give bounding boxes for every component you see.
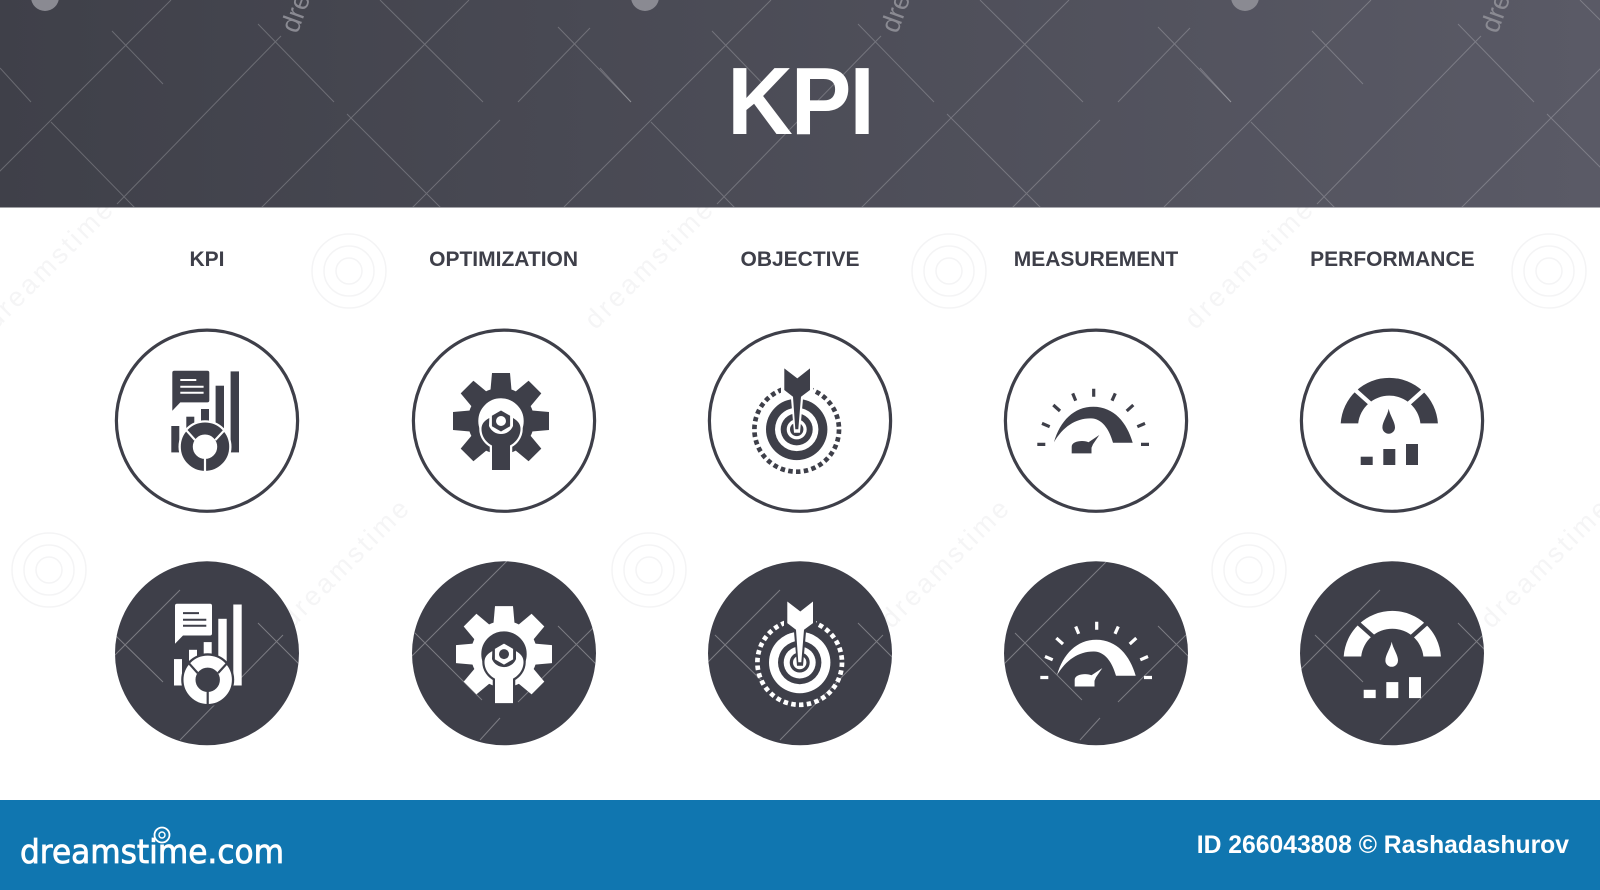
column: performance: [1300, 248, 1484, 745]
filled circle: performance: [1300, 561, 1484, 745]
watermark on white area: [0, 193, 1600, 634]
icon: gear with wrench, inverted: [456, 606, 552, 703]
column: objective: [708, 248, 892, 745]
icon: target with arrow, inverted: [757, 602, 842, 705]
label: optimization: OPTIMIZATION: [429, 248, 578, 271]
outline circle: KPI: [116, 330, 298, 511]
watermark on white area: dreamstime: [579, 193, 721, 335]
outline circle: objective: [709, 330, 891, 511]
header banner: [0, 0, 1600, 209]
image credit: ID 266043808 © Rashadashurov: [1197, 832, 1569, 859]
watermark on white area: dreamstime: [275, 492, 417, 634]
watermark on white area: dreamstime: [1179, 193, 1321, 335]
icon: speedometer gauge: [1037, 389, 1149, 453]
icon: performance meter with bars: [1341, 378, 1438, 465]
watermark on white area: dreamstime: [875, 492, 1017, 634]
column: measurement: [1004, 248, 1188, 745]
outline circle: performance: [1301, 330, 1483, 511]
label: objective: OBJECTIVE: [740, 248, 860, 271]
label: KPI: KPI: [189, 248, 225, 271]
icon: chart with speech bubble and donut: [171, 371, 239, 473]
column: optimization: [412, 248, 596, 745]
icon: chart with speech bubble and donut, inverted: [174, 604, 242, 706]
icon: performance meter with bars, inverted: [1344, 611, 1441, 698]
column: KPI: [115, 248, 299, 745]
icon: speedometer gauge, inverted: [1040, 622, 1152, 686]
title: KPI: [727, 47, 873, 155]
filled circle: optimization: [412, 561, 596, 745]
icon: gear with wrench: [453, 373, 549, 470]
watermark lines over filled circles: [100, 561, 1600, 740]
label: performance: PERFORMANCE: [1310, 248, 1475, 271]
footer bar: [0, 800, 1600, 890]
label: measurement: MEASUREMENT: [1014, 248, 1178, 271]
outline circle: measurement: [1005, 330, 1187, 511]
outline circle: optimization: [413, 330, 595, 511]
filled circle: KPI: [115, 561, 299, 745]
filled circle: objective: [708, 561, 892, 745]
footer logo: dreamstime.com: [20, 832, 284, 871]
icon: target with arrow: [754, 368, 839, 472]
filled circle: measurement: [1004, 561, 1188, 745]
